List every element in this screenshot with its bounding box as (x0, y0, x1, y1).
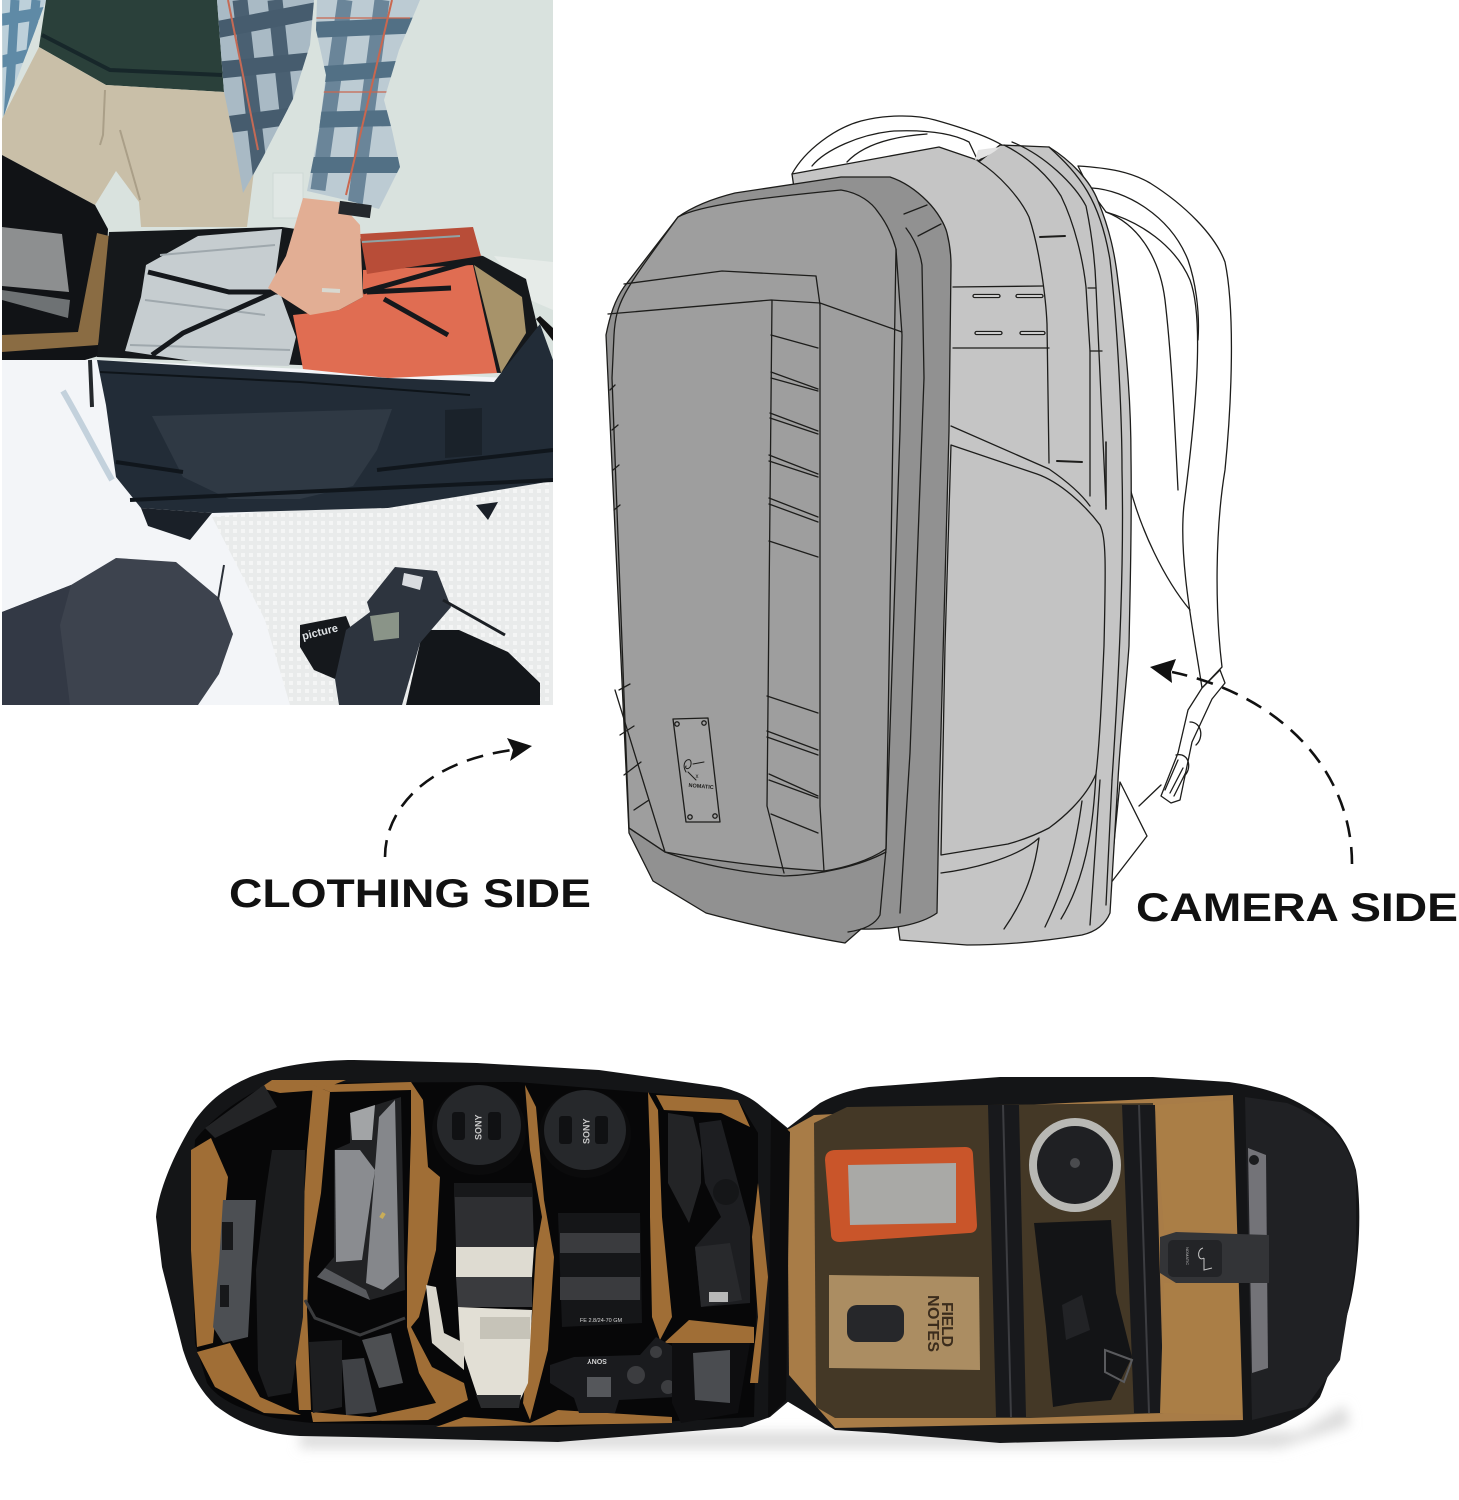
small pouch right compartment (668, 1113, 701, 1223)
light top notch (975, 147, 1000, 160)
label: clothing side: CLOTHING SIDE (229, 872, 591, 916)
watch (338, 201, 372, 218)
grey folded shirt (125, 229, 296, 366)
front shell (606, 177, 951, 943)
zipper one (988, 1105, 1026, 1417)
folded drone (317, 1097, 405, 1300)
orange shirt collar (360, 227, 481, 274)
black zoom lens (558, 1213, 642, 1327)
tablet (1248, 1148, 1268, 1373)
side gusset lines (941, 142, 1123, 929)
open lid of backpack (2, 155, 108, 360)
dark green shirt (39, 0, 224, 92)
label: camera side: CAMERA SIDE (1136, 886, 1458, 930)
tan lining (474, 265, 526, 373)
mirrorless camera (550, 1337, 675, 1413)
spine (768, 1115, 790, 1418)
curved front pocket (152, 409, 392, 499)
tan lining strip (787, 1095, 1245, 1428)
drone tray edge (305, 1300, 405, 1335)
notebook (829, 1275, 980, 1370)
left interior (191, 1082, 758, 1427)
white telephoto lens (426, 1183, 534, 1408)
webbing slots (973, 294, 1045, 334)
orange drive (825, 1147, 977, 1242)
closure tab: NOMATIC (1185, 1247, 1190, 1265)
plaid shirt front (217, 0, 314, 193)
hat (2, 558, 233, 705)
photo: open camera compartment (156, 1060, 1359, 1448)
folded pouch top left (205, 1085, 277, 1138)
illustration: grey backpack line drawing (606, 116, 1231, 945)
trousers (2, 47, 254, 227)
olive mesh interior (814, 1103, 1164, 1418)
cable coil (1033, 1122, 1117, 1208)
patch text (688, 774, 714, 791)
side zip pocket (941, 445, 1105, 855)
right shell (785, 1077, 1359, 1443)
soft ground shadow (300, 1405, 1350, 1448)
zipper pull (90, 360, 92, 407)
strap buckle and webbing (1110, 670, 1225, 884)
arrow: camera side (1150, 659, 1352, 864)
orange shirt (293, 265, 497, 378)
bottom seam (629, 828, 886, 876)
logo patch (673, 718, 720, 822)
lens cap left: SONY (474, 1114, 484, 1140)
side body of the bag (792, 145, 1131, 945)
photo: packing clothes into the backpack (0, 0, 553, 705)
batteries and chargers (309, 1333, 403, 1415)
battery lower right (672, 1343, 750, 1423)
closure tab (1160, 1232, 1269, 1283)
shoulder strap (1078, 166, 1231, 688)
drone controller (213, 1200, 256, 1343)
notebook: NOTES (924, 1295, 941, 1352)
straps and buckles (1034, 1220, 1132, 1407)
outlet (273, 173, 303, 218)
flash (695, 1120, 750, 1307)
zip band lines (848, 205, 941, 932)
black tablet pocket (1245, 1097, 1356, 1420)
patch text: NOMATIC (688, 783, 714, 791)
main clothing compartment (97, 227, 540, 373)
zipped pouch (256, 1150, 305, 1397)
left shirt plaid (2, 0, 46, 117)
mirrorless camera: SONY (587, 1357, 607, 1364)
panel seams (608, 271, 902, 332)
bottom straps (141, 502, 498, 540)
patch text: x (696, 774, 698, 780)
left shell (156, 1060, 790, 1442)
waffle blanket (212, 480, 553, 705)
compression straps (148, 259, 480, 355)
top carry handle loops (792, 116, 1002, 178)
tan compartment walls and dividers (191, 1080, 768, 1427)
camera strap (300, 616, 353, 679)
backpack lower body (97, 324, 553, 513)
photo: packing clothes into the backpack: picture (301, 622, 339, 643)
plaid shirt sleeve (307, 0, 420, 209)
sheet shadow (63, 391, 112, 480)
arrow: clothing side (385, 738, 532, 857)
notebook: FIELD (938, 1302, 955, 1347)
hand (268, 198, 363, 315)
zipper two (1122, 1105, 1164, 1413)
tan sleeve (1155, 1100, 1244, 1415)
webbing column (767, 300, 824, 873)
black zoom lens: FE 2.8/24-70 GM (580, 1318, 623, 1324)
bed sheet (2, 360, 498, 705)
black seam (1233, 1095, 1252, 1420)
charger in lid (2, 227, 69, 292)
lens cap left (432, 1085, 526, 1175)
main front panel (612, 190, 902, 871)
camera body (335, 567, 451, 705)
left side webbing ticks (610, 385, 665, 852)
lens cap right: SONY (582, 1118, 592, 1144)
baseboard (494, 256, 553, 310)
lens cap right (539, 1090, 631, 1178)
camera lens (406, 630, 540, 705)
side tick marks (1040, 236, 1082, 462)
